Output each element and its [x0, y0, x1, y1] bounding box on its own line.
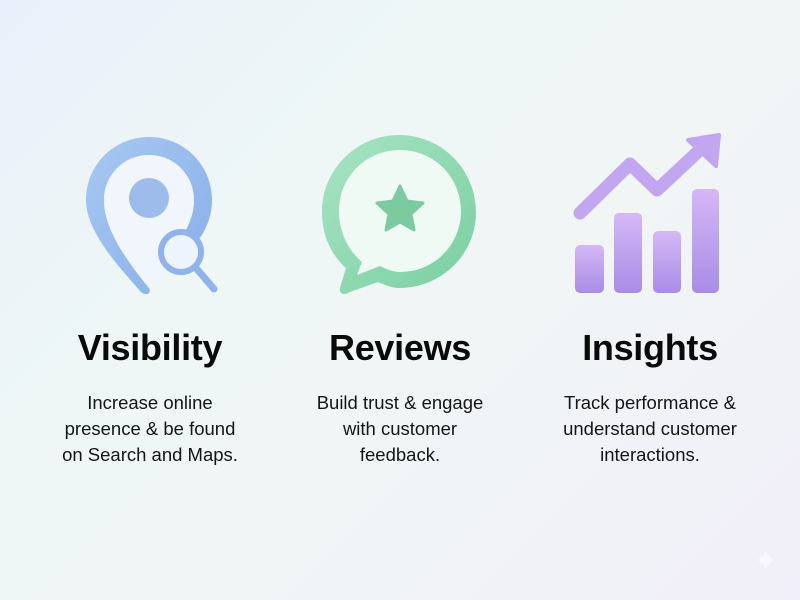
text: insights description	[563, 392, 737, 465]
text: visibility description: on Search and Maps.	[62, 444, 238, 465]
text: reviews description: with customer	[343, 418, 457, 439]
text: visibility description	[62, 392, 238, 465]
icon: speech bubble with star	[322, 135, 476, 294]
panel: insights	[563, 327, 737, 465]
panel: visibility	[62, 327, 238, 465]
heading: Insights: Insights	[582, 327, 718, 368]
icon: bar chart with trend arrow	[575, 135, 719, 293]
text: insights description: understand customer	[563, 418, 737, 439]
text: reviews description: feedback.	[360, 444, 440, 465]
text: insights description: interactions.	[600, 444, 700, 465]
text: visibility description: Increase online	[87, 392, 213, 413]
text: visibility description: presence & be found	[65, 418, 235, 439]
text: insights description: Track performance &	[564, 392, 736, 413]
icon: map pin with magnifier	[86, 137, 214, 294]
heading: Reviews: Reviews	[329, 327, 471, 368]
panel: reviews	[317, 327, 483, 465]
text: reviews description: Build trust & engage	[317, 392, 483, 413]
text: reviews description	[317, 392, 483, 465]
heading: Visibility: Visibility	[78, 327, 222, 368]
icon: sparkle	[757, 550, 775, 570]
